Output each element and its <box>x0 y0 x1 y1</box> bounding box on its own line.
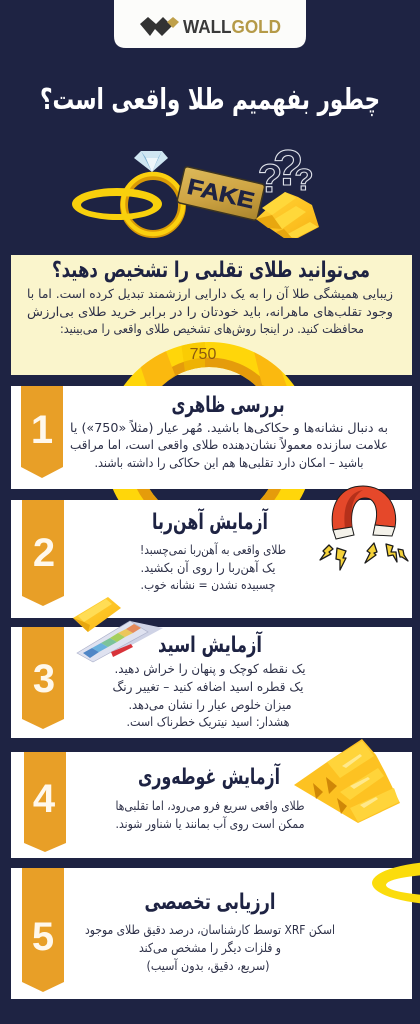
icon: gold ring at right edge <box>372 861 420 905</box>
text 5: اسکن XRF توسط کارشناسان، درصد دقیق طلای موجود <box>85 922 335 938</box>
icon: gold bars pile <box>256 192 319 238</box>
logo mark <box>140 17 179 36</box>
panel: magnet test <box>11 500 412 618</box>
big gold ring with 750 stamp <box>112 342 306 500</box>
number 4: 4 <box>33 777 56 821</box>
text 5: (سریع، دقیق، بدون آسیب) <box>146 958 270 974</box>
text 2: طلای واقعی به آهن‌ربا نمی‌چسبد! <box>140 542 286 558</box>
icon: diamond ring <box>123 151 183 234</box>
icon: lightning bolts <box>320 543 408 570</box>
number 5: 5 <box>32 915 54 959</box>
text 1 <box>70 419 388 471</box>
text 1: علامت سازنده معمولاً نشان‌دهنده طلای واقعی است، اما مراقب <box>70 436 388 453</box>
number 1: 1 <box>31 408 53 452</box>
panel: visual inspection <box>11 386 412 489</box>
panel: acid test <box>11 627 412 738</box>
ribbon 5 <box>22 868 64 992</box>
intro text: محافظت کنید. در اینجا روش‌های تشخیص طلای واقعی را می‌بینید: <box>60 321 364 337</box>
text 5: و فلزات دیگر را مشخص می‌کند <box>139 940 281 956</box>
ribbon 3 <box>22 627 64 729</box>
text 4: طلای واقعی سریع فرو می‌رود، اما تقلبی‌ها <box>116 798 305 814</box>
icon: fake gold plate <box>177 166 265 221</box>
text 1: به دنبال نشانه‌ها و حکاکی‌ها باشید. مُهر عیار (مثلاً «750») یا <box>70 419 388 436</box>
number 2: 2 <box>33 531 55 575</box>
icon: horseshoe magnet <box>332 486 396 539</box>
text 2 <box>140 542 286 593</box>
intro text <box>27 286 393 337</box>
text 1: باشید – امکان دارد تقلبی‌ها هم این حکاکی را داشته باشند. <box>94 455 364 471</box>
text 3: هشدار: اسید نیتریک خطرناک است. <box>126 714 290 730</box>
text 3: یک نقطه کوچک و پنهان را خراش دهید. <box>114 661 306 677</box>
text 2: یک آهن‌ربا را روی آن بکشید. <box>140 560 276 576</box>
ribbon 4 <box>24 752 66 852</box>
panel: water test <box>11 752 412 858</box>
logo wordmark: WALLGOLD <box>183 17 281 37</box>
text 4 <box>116 798 305 832</box>
heading 3: آزمایش اسید <box>158 630 262 658</box>
ribbon 2 <box>22 500 64 606</box>
heading 5: ارزیابی تخصصی <box>144 890 276 915</box>
text 3: میزان خلوص عیار را نشان می‌دهد. <box>128 697 292 713</box>
heading 4: آزمایش غوطه‌وری <box>138 762 280 790</box>
icon: fake gold plate: FAKE <box>185 174 257 213</box>
panel: intro <box>11 255 412 375</box>
stamp 750: 750 <box>190 346 216 363</box>
icon: question marks: ? <box>295 162 313 197</box>
logo card <box>114 0 306 48</box>
icon: flat gold ring <box>72 188 162 220</box>
heading 1: بررسی ظاهری <box>172 393 284 418</box>
icon: question marks: ? <box>258 157 282 201</box>
ribbon 1 <box>21 386 63 478</box>
intro text: زیبایی همیشگی طلا آن را به یک دارایی ارزشمند تبدیل کرده است. اما با <box>27 286 393 302</box>
heading 2: آزمایش آهن‌ربا <box>152 507 268 535</box>
number 3: 3 <box>33 657 55 701</box>
icon: question marks: ? <box>273 140 303 196</box>
icon: small gold bar <box>73 597 121 632</box>
text 4: ممکن است روی آب بمانند یا شناور شوند. <box>116 816 304 832</box>
intro text: وجود تقلب‌های ماهرانه، باید خودتان را در برابر خرید طلای بی‌ارزش <box>27 304 393 320</box>
panel: expert assessment <box>11 868 412 999</box>
text 3 <box>112 661 306 730</box>
text 2: چسبیده نشدن = نشانه خوب. <box>140 577 276 593</box>
text 5 <box>85 922 335 974</box>
icon: gold bars stack <box>294 739 400 823</box>
icon: acid test strip <box>77 621 163 662</box>
text 3: یک قطره اسید اضافه کنید – تغییر رنگ <box>112 679 304 695</box>
icon: question marks <box>258 140 313 201</box>
